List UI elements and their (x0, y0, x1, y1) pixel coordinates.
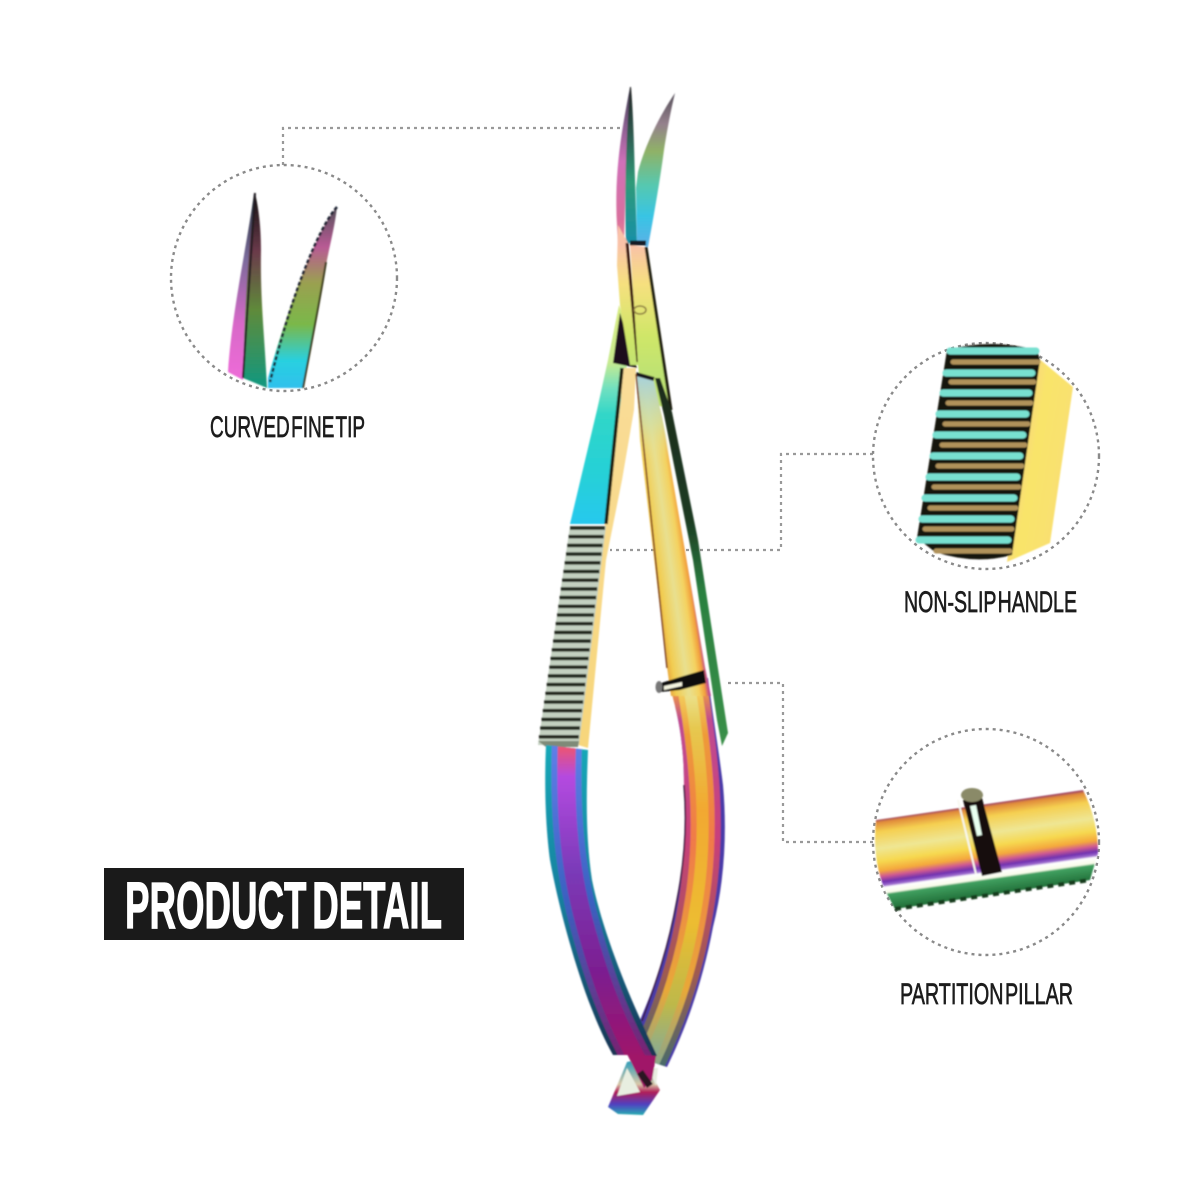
circle: curved fine tip (171, 165, 397, 391)
handle joint loop (608, 1054, 660, 1115)
infographic canvas (104, 86, 1100, 1116)
crossing strand (617, 225, 640, 365)
scissors illustration (538, 87, 730, 1115)
title badge: product detail (104, 868, 464, 942)
label: non-slip handle: NON-SLIP HANDLE (904, 586, 1077, 619)
title badge: product detail: PRODUCT DETAIL (125, 868, 442, 942)
right arm upper (630, 245, 672, 410)
label: partition pillar: PARTITION PILLAR (900, 978, 1073, 1011)
circle: non-slip handle (873, 343, 1099, 569)
connector: partition pillar (726, 683, 873, 842)
connector: non-slip handle (610, 454, 873, 550)
right handle (640, 677, 726, 1068)
right arm main body (636, 372, 711, 696)
right edge green strip (655, 378, 728, 746)
left handle (566, 740, 640, 1065)
serrated grip (538, 526, 606, 747)
circle: partition pillar (873, 729, 1099, 955)
partition pillar (656, 670, 706, 693)
connector: curved fine tip (283, 128, 620, 165)
dark triangle near pivot (613, 313, 637, 368)
label: curved fine tip: CURVED FINE TIP (210, 411, 365, 444)
detail: curved fine tip blades (228, 193, 337, 388)
right blade (636, 93, 675, 247)
left blade (616, 87, 637, 265)
left arm upper (570, 305, 631, 524)
left arm yellow side (578, 368, 636, 748)
detail: partition pillar (875, 788, 1098, 909)
detail: non-slip handle ridges (917, 344, 1073, 562)
right handle inner edge (642, 785, 685, 1021)
